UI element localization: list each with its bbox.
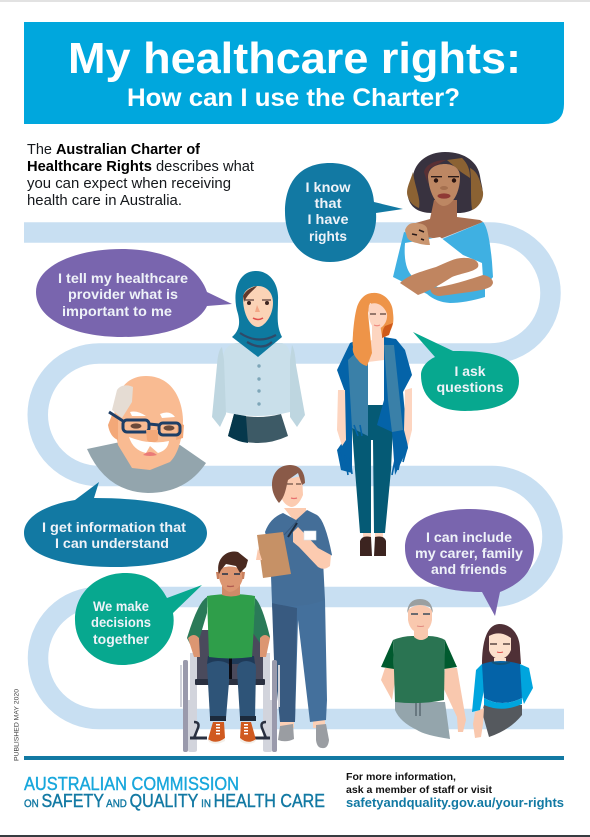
header banner <box>24 22 564 124</box>
logo: Australian Commission on Safety and Quality in Health Care: ON SAFETY AND QUALITY IN HEALTH CARE <box>24 791 325 811</box>
figure: man in green t-shirt <box>381 599 466 739</box>
figure: nurse with clipboard <box>256 465 332 748</box>
publication date: PUBLISHED MAY 2020 <box>14 689 20 761</box>
contact information: ask a member of staff or visit <box>346 784 492 796</box>
speech bubble: tell provider what is important: I tell my healthcare <box>58 271 189 286</box>
figure: mother with baby <box>393 152 493 303</box>
speech bubble: We make decisions together: decisions <box>91 615 151 630</box>
speech bubble: I get information: I can understand <box>55 536 169 551</box>
speech bubble: I ask questions <box>413 332 519 411</box>
winding path ribbon <box>24 232 564 719</box>
speech bubble: I get information <box>24 482 207 567</box>
speech bubble: tell provider what is important: important to me <box>62 304 173 319</box>
figure: woman in hijab <box>212 271 305 443</box>
figure: young man in wheelchair <box>180 552 280 752</box>
intro text block: The Australian Charter of <box>27 142 200 158</box>
logo: Australian Commission on Safety and Quality in Health Care <box>24 774 325 811</box>
intro text block: health care in Australia. <box>27 193 182 209</box>
speech bubble: I know that I have rights: I know <box>306 180 351 195</box>
figure: woman in blue top <box>472 624 533 738</box>
speech bubble: I ask questions: questions <box>436 380 504 395</box>
contact information: For more information, <box>346 771 456 783</box>
speech bubble: We make decisions together: together <box>93 632 150 647</box>
figure: older man with glasses <box>87 376 206 493</box>
speech bubble: tell provider what is important: provider what is <box>68 287 178 302</box>
speech bubble: carer family friends: I can include <box>426 530 513 545</box>
intro text block: Healthcare Rights describes what <box>27 159 254 175</box>
speech bubble: We make decisions together <box>75 573 202 665</box>
contact information <box>346 771 564 810</box>
contact information: safetyandquality.gov.au/your-rights <box>346 795 564 810</box>
speech bubble: I ask questions: I ask <box>454 364 486 379</box>
intro text block: you can expect when receiving <box>27 176 231 192</box>
subtitle: How can I use the Charter? <box>127 84 460 112</box>
logo: Australian Commission on Safety and Quality in Health Care: AUSTRALIAN COMMISSION <box>24 774 239 794</box>
speech bubble: carer family friends <box>405 509 534 616</box>
speech bubble: I know that I have rights: that <box>314 196 342 211</box>
speech bubble: I know that I have rights: rights <box>309 229 347 244</box>
speech bubble: I get information: I get information that <box>42 520 187 535</box>
speech bubble: carer family friends: and friends <box>431 562 507 577</box>
speech bubble: I know that I have rights <box>285 163 403 262</box>
intro text block <box>27 142 254 209</box>
figure: woman with red hair <box>337 293 412 556</box>
title: My healthcare rights: <box>68 34 521 83</box>
speech bubble: carer family friends: my carer, family <box>415 546 524 561</box>
speech bubble: I know that I have rights: I have <box>308 212 349 227</box>
speech bubble: tell provider what is important <box>36 249 232 337</box>
speech bubble: We make decisions together: We make <box>93 599 149 614</box>
